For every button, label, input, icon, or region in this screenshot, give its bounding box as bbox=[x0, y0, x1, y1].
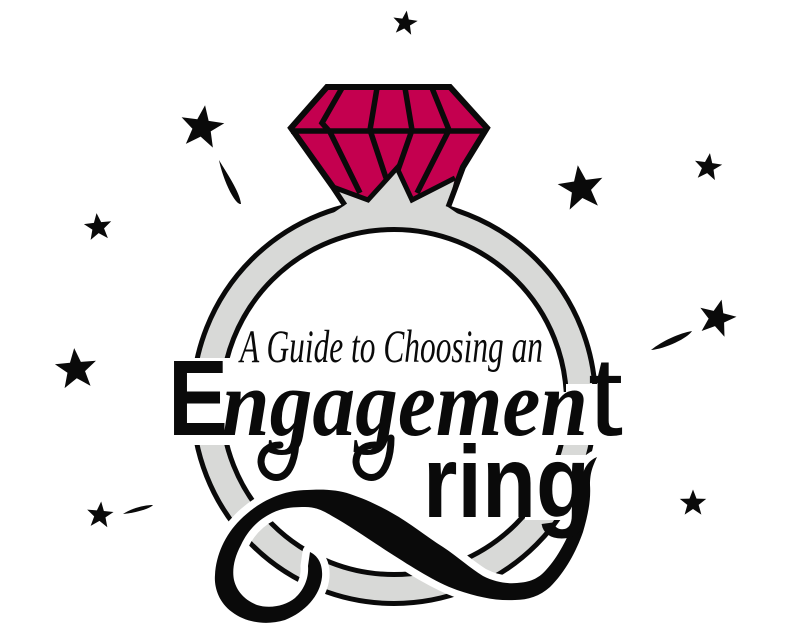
star: right bbox=[695, 295, 740, 338]
sparkle trail: right bbox=[651, 331, 692, 350]
star: upper right small bbox=[693, 151, 724, 181]
flourish: descender curls of the g letters bbox=[261, 438, 391, 477]
star: upper right large bbox=[555, 162, 606, 211]
heading: Engagement: t bbox=[588, 334, 623, 459]
star: upper left bbox=[178, 102, 226, 149]
star: left small bbox=[83, 212, 113, 240]
icon: ring band bbox=[207, 215, 581, 589]
stars and sparkles bbox=[54, 9, 740, 528]
heading: A Guide to Choosing an: A Guide to Choosing an bbox=[238, 321, 543, 373]
heading: Engagement: E bbox=[168, 337, 228, 458]
flourish: swirl under title bbox=[215, 457, 597, 623]
star: top bbox=[391, 9, 419, 35]
star: lower right bbox=[680, 490, 706, 515]
sparkle trail: upper left bbox=[219, 160, 241, 204]
heading: ring: ring bbox=[423, 425, 590, 539]
star: left bbox=[54, 346, 98, 389]
heading: Engagement: ngagemen bbox=[222, 352, 588, 456]
title backing: white cut-outs over the band bbox=[170, 358, 625, 520]
star: lower left bbox=[86, 500, 114, 528]
icon: ring prong outline bbox=[333, 167, 463, 207]
icon: ring prong setting bbox=[320, 168, 470, 222]
sparkle trail: lower left bbox=[123, 505, 153, 514]
icon: ruby gem bbox=[291, 87, 487, 207]
